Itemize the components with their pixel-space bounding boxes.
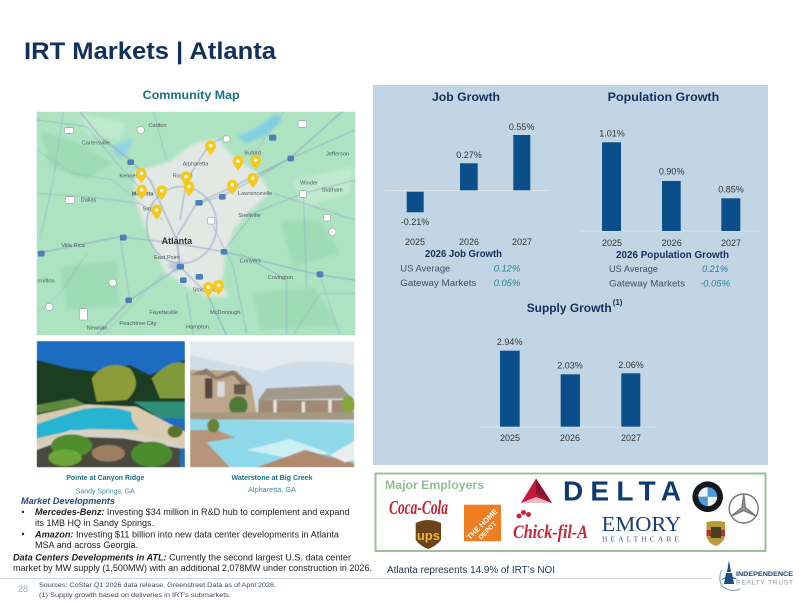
text block: data centers: market by MW supply (1,500MW) with an additional 2,078MW under construction in 2026. <box>13 563 372 573</box>
map labels: Snellville <box>238 213 261 219</box>
panel: job growth chart: 0.55% <box>509 122 534 132</box>
panel: population growth chart: 0.90% <box>659 166 684 176</box>
logo: Delta triangle <box>521 478 552 503</box>
logo: Independence Realty Trust: INDEPENDENCE <box>736 571 794 578</box>
footnotes <box>39 582 276 599</box>
panel: job growth chart <box>385 90 548 247</box>
map labels: Lawrenceville <box>238 191 272 197</box>
caption: Pointe at Canyon Ridge: Pointe at Canyon Ridge <box>66 473 144 482</box>
logo: The Home Depot: THE HOME <box>465 507 499 541</box>
panel: population growth chart: 2025 <box>602 238 622 248</box>
panel: market growth <box>373 85 768 465</box>
panel: 2026 job growth comparison: 0.05% <box>494 278 521 289</box>
map labels: Dallas <box>81 197 97 203</box>
map labels: Hampton <box>186 325 209 331</box>
map labels: Peachtree City <box>119 321 157 327</box>
map labels: Stockbridge <box>193 287 223 293</box>
map labels: Alpharetta <box>183 161 209 167</box>
logo: Delta wordmark: DELTA <box>563 476 681 506</box>
panel: 2026 population growth comparison: US Average <box>609 264 658 275</box>
panel: supply growth chart: 2025 <box>500 433 520 443</box>
panel: major employers <box>376 474 766 551</box>
panel: population growth chart: 1.01% <box>599 128 625 138</box>
heading: major employers: Major Employers <box>385 478 484 492</box>
map route shields <box>38 135 323 303</box>
photo: Waterstone at Big Creek <box>190 342 355 467</box>
caption: Waterstone at Big Creek: Waterstone at Big Creek <box>232 473 313 482</box>
panel: supply growth chart: 2027 <box>621 433 641 443</box>
panel: 2026 population growth comparison <box>609 250 731 290</box>
map labels: Kennesaw <box>119 173 147 179</box>
panel: population growth chart: Population Growth <box>608 90 719 104</box>
map labels: Conyers <box>240 258 261 264</box>
panel: 2026 job growth comparison: 2026 Job Growth <box>425 249 502 260</box>
text block: market developments bullets: Mercedes-Benz: Investing $34 million in R&D hub to complement and expand <box>35 507 350 517</box>
text block: data centers <box>13 552 372 573</box>
panel: population growth chart: 0.85% <box>718 184 744 194</box>
logo: Independence Realty Trust: REALTY TRUST <box>736 580 793 586</box>
footnotes: (1) Supply growth based on deliveries in IRT’s submarkets. <box>39 592 231 599</box>
text block: market developments bullets <box>22 507 350 550</box>
panel: 2026 population growth comparison: 2026 Population Growth <box>616 250 729 261</box>
map labels: Jefferson <box>326 151 349 157</box>
panel: population growth chart <box>580 90 760 248</box>
panel: supply growth chart: 2.03% <box>557 360 583 370</box>
logo: The Home Depot: DEPOT <box>478 521 498 541</box>
map labels: Newnan <box>87 325 107 331</box>
panel: job growth chart: 2027 <box>512 237 532 247</box>
logo: Chick-fil-A <box>513 510 588 543</box>
panel: 2026 job growth comparison: US Average <box>400 264 450 274</box>
map labels: Statham <box>322 187 343 193</box>
map labels: Roswell <box>173 174 192 180</box>
map labels: East Point <box>154 255 180 261</box>
map highway markers <box>46 121 336 320</box>
panel: supply growth chart: 2026 <box>560 433 580 443</box>
page number: 28 <box>18 584 28 595</box>
logo: UPS <box>416 520 441 549</box>
text block: market developments bullets: MSA and across Georgia. <box>35 540 138 550</box>
panel: population growth chart: 2027 <box>721 238 741 248</box>
panel: supply growth chart <box>480 298 656 443</box>
map pins <box>136 140 261 297</box>
callout: NOI share: Atlanta represents 14.9% of IRT’s NOI <box>387 565 555 576</box>
map labels: Winder <box>300 181 318 187</box>
logo: UPS: ups <box>417 528 440 543</box>
text block: market developments bullets: its 1MB HQ in Sandy Springs. <box>35 518 154 528</box>
logo: Emory Healthcare: EMORY <box>602 512 681 536</box>
logo: BMW <box>692 481 723 512</box>
map labels: Covington <box>268 275 293 281</box>
footnotes: Sources: CoStar Q1 2026 data release. Greenstreet Data as of April 2026. <box>39 582 276 589</box>
panel: job growth chart: 0.27% <box>456 150 482 160</box>
logo: Chick-fil-A: Chick-fil-A <box>513 522 588 543</box>
map labels: Atlanta <box>162 236 193 246</box>
map labels: Carlton <box>148 123 167 129</box>
photo: Pointe at Canyon Ridge <box>37 341 185 467</box>
subheading: market developments: Market Developments <box>21 496 115 506</box>
panel: 2026 population growth comparison: 0.21% <box>702 264 729 275</box>
panel: 2026 population growth comparison: -0.05% <box>700 278 731 290</box>
map <box>37 100 355 335</box>
panel: job growth chart: 2026 <box>459 237 479 247</box>
map labels: rrollton <box>37 279 55 285</box>
panel: 2026 job growth comparison: Gateway Markets <box>400 278 477 289</box>
panel: supply growth chart: Supply Growth <box>527 301 612 315</box>
map labels: Marietta <box>132 191 154 197</box>
panel: supply growth chart: (1) <box>613 298 623 307</box>
location: Alpharetta: Alpharetta, GA <box>248 485 296 494</box>
map labels <box>37 123 349 331</box>
text block: data centers: Data Centers Developments in ATL: Currently the second largest U.S. data center <box>13 552 351 562</box>
panel: 2026 job growth comparison <box>400 249 521 289</box>
logo: Coca-Cola: Coca-Cola <box>389 497 448 519</box>
map labels: McDonough <box>210 310 240 316</box>
panel: 2026 job growth comparison: 0.12% <box>494 264 521 274</box>
logo: Porsche <box>706 521 725 546</box>
map labels: Cartersville <box>82 140 110 146</box>
map labels: Buford <box>244 150 261 156</box>
text block: market developments bullets: Amazon: Investing $11 billion into new data center developments in Atlanta <box>34 530 340 540</box>
heading: community map: Community Map <box>143 88 240 102</box>
panel: job growth chart: -0.21% <box>401 217 429 227</box>
panel: population growth chart: 2026 <box>662 238 682 248</box>
logo: Mercedes-Benz <box>729 494 758 523</box>
panel: supply growth chart: 2.06% <box>618 360 644 370</box>
panel: supply growth chart: 2.94% <box>497 337 522 347</box>
location: Sandy Springs: Sandy Springs, GA <box>76 486 135 496</box>
logo: Independence Realty Trust <box>720 560 794 590</box>
panel: job growth chart: 2025 <box>405 237 425 247</box>
panel: job growth chart: Job Growth <box>432 90 500 104</box>
map labels: Smyrna <box>143 206 163 212</box>
title: IRT Markets | Atlanta <box>24 38 277 65</box>
map labels: Villa Rica <box>61 243 86 249</box>
panel: 2026 population growth comparison: Gateway Markets <box>609 278 685 290</box>
logo: Emory Healthcare: HEALTHCARE <box>602 534 679 544</box>
map labels: Fayetteville <box>149 310 178 316</box>
